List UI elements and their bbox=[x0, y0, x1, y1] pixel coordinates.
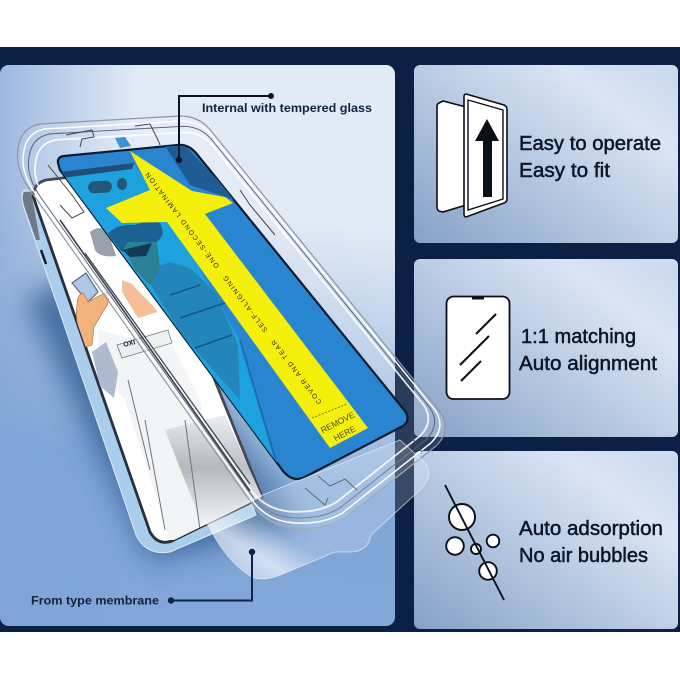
membrane film bbox=[207, 440, 429, 579]
panel: product illustration bbox=[0, 65, 445, 626]
frame clips bbox=[48, 124, 422, 505]
text: remove here: HERE bbox=[332, 423, 358, 443]
text: peel label instructions: COVER AND TEAR SELF-ALIGNING ONE-SECOND LAMINATION bbox=[145, 171, 324, 405]
callout: from type membrane: From type membrane bbox=[31, 594, 159, 608]
tempered glass screen bbox=[58, 137, 408, 479]
text: 1:1 matching: 1:1 matching bbox=[521, 326, 636, 348]
icon: phone with glass glare bbox=[446, 296, 510, 399]
yellow peel label bbox=[106, 151, 368, 448]
back phone bbox=[22, 170, 262, 553]
camera cutouts bbox=[88, 180, 112, 194]
card: adsorption and bubbles bbox=[414, 451, 678, 629]
light blue wedge bbox=[60, 165, 278, 468]
card: matching and alignment bbox=[414, 259, 678, 437]
card: easy to operate bbox=[414, 65, 678, 243]
text: auto adsorption: Auto adsorption bbox=[519, 518, 663, 540]
person silhouette on screen bbox=[108, 221, 240, 400]
text: remove here: REMOVE bbox=[319, 409, 357, 435]
text: easy to operate: Easy to operate bbox=[519, 133, 661, 155]
transparent applicator frame bbox=[18, 116, 445, 528]
phone shadow bbox=[25, 250, 300, 560]
text: jacket logo: OXI bbox=[123, 339, 136, 349]
person illustration on phone bbox=[72, 228, 262, 540]
text: no air bubbles: No air bubbles bbox=[519, 545, 648, 567]
text: auto alignment: Auto alignment bbox=[519, 353, 657, 375]
callout: from type membrane bbox=[31, 549, 255, 608]
icon: applicator with up arrow bbox=[437, 94, 507, 217]
icon: bubbles on a line bbox=[445, 485, 504, 600]
text: easy to fit: Easy to fit bbox=[519, 160, 610, 182]
glass pull tab bbox=[115, 137, 131, 148]
callout: internal with tempered glass bbox=[176, 93, 372, 163]
callout: internal with tempered glass: Internal with tempered glass bbox=[202, 101, 372, 115]
